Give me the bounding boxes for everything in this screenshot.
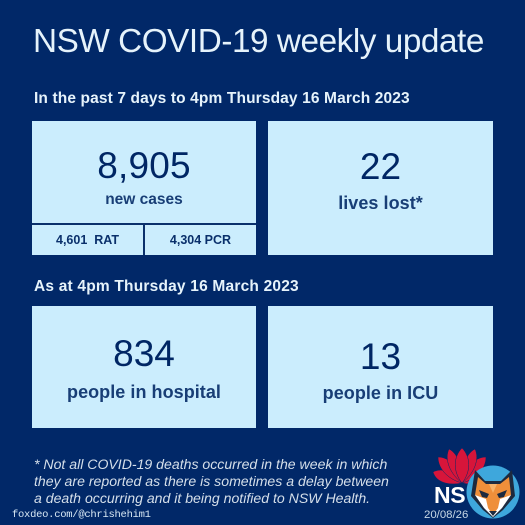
title: NSW COVID-19 weekly update — [33, 23, 484, 60]
hospital label: people in hospital — [67, 382, 221, 402]
hospital number: 834 — [113, 333, 175, 374]
footnote: * Not all COVID-19 deaths occurred in the week in which — [34, 456, 387, 472]
footnote: they are reported as there is sometimes a delay between — [34, 473, 389, 489]
new cases label: new cases — [105, 191, 183, 208]
breakdown: RAT: 4,601 RAT — [56, 233, 119, 247]
breakdown: RAT — [32, 223, 145, 255]
waratah flower — [433, 448, 488, 484]
ICU label: people in ICU — [323, 383, 438, 403]
breakdown: PCR — [145, 223, 256, 255]
lives lost number: 22 — [360, 146, 401, 187]
footnote — [34, 456, 389, 506]
footnote: a death occurring and it being notified to NSW Health. — [34, 490, 370, 506]
icon: waratah logo and fox badge — [433, 448, 520, 518]
heading: as at: As at 4pm Thursday 16 March 2023 — [34, 278, 299, 295]
breakdown: PCR: 4,304 PCR — [170, 233, 231, 247]
heading: past 7 days: In the past 7 days to 4pm Thursday 16 March 2023 — [34, 90, 410, 107]
panel: lives lost — [268, 121, 493, 255]
panel: new cases — [32, 121, 256, 255]
fox badge — [466, 466, 520, 518]
ICU number: 13 — [360, 336, 401, 377]
date stamp: 20/08/26 — [424, 509, 468, 521]
watermark url: foxdeo.com/@chrishehim1 — [12, 509, 151, 521]
panel: ICU — [268, 306, 493, 428]
new cases number: 8,905 — [97, 145, 191, 186]
panel: hospital — [32, 306, 256, 428]
lives lost label: lives lost* — [338, 193, 423, 213]
logo letters: NS — [434, 482, 465, 508]
